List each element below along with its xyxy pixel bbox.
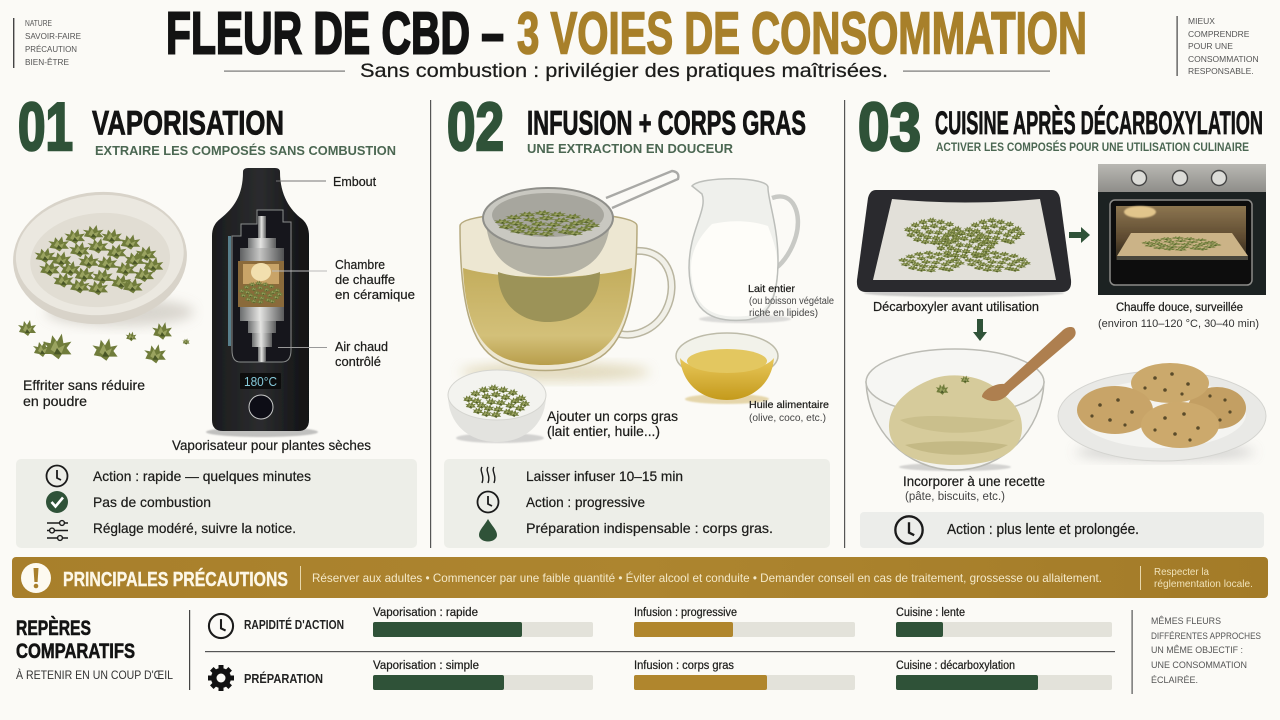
caption: corps gras [547, 409, 678, 439]
number 03: 03 [858, 89, 921, 165]
bar: cuisine lente: Cuisine : lente [896, 607, 965, 619]
icon: steam [481, 467, 495, 483]
comparison dividers [189, 610, 1133, 694]
closing note: DIFFÉRENTES APPROCHES [1151, 631, 1261, 642]
banner side note: Respecter la [1154, 566, 1209, 578]
closing note: UNE CONSOMMATION [1151, 660, 1247, 671]
milk jug [689, 179, 798, 323]
info box 02: Laisser infuser 10–15 min [526, 468, 683, 484]
right note [1176, 16, 1259, 76]
label: chambre de chauffe: en céramique [335, 287, 415, 302]
closing note: UN MÊME OBJECTIF : [1151, 645, 1243, 656]
bar: vaporisation simple [373, 660, 593, 690]
label: lait entier: Lait entier [748, 283, 795, 295]
comparison heading [16, 617, 174, 682]
banner heading: PRINCIPALES PRÉCAUTIONS [63, 568, 288, 591]
label: lait entier: (ou boisson végétale [749, 296, 834, 307]
left keyword note: PRÉCAUTION [25, 45, 77, 54]
icon: clock [895, 516, 923, 544]
bar: vaporisation rapide: Vaporisation : rapide [373, 607, 478, 619]
panel: 01 vaporisation [9, 89, 417, 548]
number 01: 01 [18, 89, 73, 165]
label: lait entier [748, 283, 834, 319]
title: FLEUR DE CBD – [166, 0, 504, 66]
arrow: down [973, 319, 987, 341]
caption: gentle heat [1098, 302, 1259, 330]
glass cup with strainer [460, 171, 678, 381]
cookie front [1141, 402, 1219, 448]
info box 02: Préparation indispensable : corps gras. [526, 520, 773, 536]
icon: drop [479, 519, 497, 542]
banner side note: réglementation locale. [1154, 578, 1253, 590]
caption: decarboxylate: Décarboxyler avant utilisation [873, 300, 1039, 314]
label: air chaud: Air chaud [335, 339, 388, 354]
right note: MIEUX [1188, 16, 1215, 26]
info box 03: Action : plus lente et prolongée. [947, 522, 1139, 538]
caption: recipe: (pâte, biscuits, etc.) [905, 491, 1005, 503]
info box 01 [16, 459, 417, 548]
label: air chaud: contrôlé [335, 354, 381, 369]
panel: 03 cuisine [857, 89, 1266, 548]
precautions banner [12, 557, 1268, 598]
closing note: MÊMES FLEURS [1151, 616, 1221, 627]
closing note: ÉCLAIRÉE. [1151, 675, 1198, 686]
cookie right [1188, 387, 1246, 429]
vaporizer device cutaway: 180°C [244, 375, 277, 389]
caption: recipe [903, 474, 1045, 503]
comparison heading: À RETENIR EN UN COUP D'ŒIL [16, 669, 174, 682]
left keyword note: SAVOIR-FAIRE [25, 32, 81, 41]
bar: cuisine décarboxylation: Cuisine : décarboxylation [896, 660, 1015, 672]
panel: 02 infusion [444, 89, 834, 548]
info box 03 [860, 512, 1264, 548]
label: air chaud [278, 339, 388, 369]
icon: warning [21, 563, 51, 593]
caption: recipe: Incorporer à une recette [903, 474, 1045, 489]
label: chambre de chauffe [272, 257, 415, 302]
row: préparation [208, 660, 1112, 691]
left keyword note: NATURE [25, 19, 52, 28]
comparison heading: REPÈRES [16, 617, 91, 640]
column dividers [430, 100, 845, 548]
info box 01: Réglage modéré, suivre la notice. [93, 520, 296, 536]
bar: cuisine décarboxylation [896, 660, 1112, 690]
info box 02 [444, 459, 830, 548]
subheading: EXTRAIRE LES COMPOSÉS SANS COMBUSTION [95, 143, 396, 158]
label: embout: Embout [333, 175, 377, 189]
cookie left [1077, 386, 1153, 434]
comparison heading: COMPARATIFS [16, 640, 135, 663]
caption: crumble: en poudre [23, 393, 87, 409]
info box 01: Pas de combustion [93, 494, 211, 510]
bar: infusion corps gras: Infusion : corps gras [634, 660, 734, 672]
caption: vaporizer: Vaporisateur pour plantes sèches [172, 438, 371, 453]
plate of cookies [1058, 363, 1266, 461]
right note: POUR UNE [1188, 41, 1233, 51]
row: rapidité d'action [209, 607, 1112, 638]
icon: check [46, 491, 68, 513]
mixing bowl [866, 327, 1076, 471]
info box 01: Action : rapide — quelques minutes [93, 468, 311, 484]
label: embout [276, 175, 377, 189]
label: chambre de chauffe: Chambre [335, 257, 385, 272]
banner side note [1154, 566, 1253, 590]
row: préparation: PRÉPARATION [244, 671, 323, 686]
label: huile: (olive, coco, etc.) [749, 413, 826, 424]
arrow: tray to oven [1069, 227, 1090, 243]
oil bowl [676, 333, 778, 404]
bar: cuisine lente [896, 607, 1112, 637]
title [166, 0, 1087, 66]
bar: vaporisation simple: Vaporisation : simple [373, 660, 479, 672]
left keyword note: BIEN-ÊTRE [25, 58, 69, 67]
banner text: Réserver aux adultes • Commencer par une faible quantité • Éviter alcool et conduite • Demander conseil en cas de traitement, grossesse ou allaitement. [312, 570, 1102, 585]
number 02: 02 [447, 89, 504, 165]
icon: clock [478, 492, 498, 512]
bar: infusion progressive: Infusion : progressive [634, 607, 737, 619]
caption: corps gras: (lait entier, huile...) [547, 424, 660, 439]
label: huile [749, 399, 829, 424]
caption: gentle heat: (environ 110–120 °C, 30–40 min) [1098, 318, 1259, 330]
bar: infusion progressive [634, 607, 855, 637]
info box 02: Action : progressive [526, 494, 645, 510]
right note: CONSOMMATION [1188, 54, 1259, 64]
loose flower pieces [18, 320, 190, 363]
heading infusion: INFUSION + CORPS GRAS [527, 104, 806, 142]
label: lait entier: riche en lipides) [749, 308, 818, 319]
icon: sliders [47, 521, 68, 540]
small bowl of flowers [448, 370, 546, 443]
row: rapidité d'action: RAPIDITÉ D'ACTION [244, 617, 344, 632]
subheading: UNE EXTRACTION EN DOUCEUR [527, 141, 734, 156]
vaporizer device cutaway [206, 168, 318, 437]
caption: gentle heat: Chauffe douce, surveillée [1116, 302, 1243, 314]
right note: RESPONSABLE. [1188, 66, 1254, 76]
baking tray [857, 190, 1071, 297]
heading vaporisation: VAPORISATION [92, 104, 284, 142]
subtitle: Sans combustion : privilégier des pratiques maîtrisées. [360, 61, 888, 82]
stone bowl of crumbled flowers [9, 186, 194, 330]
icon: clock [46, 466, 68, 486]
label: huile: Huile alimentaire [749, 399, 829, 411]
bar: infusion corps gras [634, 660, 855, 690]
label: chambre de chauffe: de chauffe [335, 272, 395, 287]
icon: clock [209, 614, 233, 638]
right note: COMPRENDRE [1188, 29, 1250, 39]
caption: crumble [23, 377, 145, 409]
caption: corps gras: Ajouter un corps gras [547, 409, 678, 424]
oven [1098, 164, 1266, 295]
left keyword note [13, 18, 81, 68]
caption: crumble: Effriter sans réduire [23, 377, 145, 393]
cookie top [1131, 363, 1209, 403]
closing note [1151, 616, 1261, 686]
bar: vaporisation rapide [373, 607, 593, 637]
icon: gear [208, 665, 234, 691]
